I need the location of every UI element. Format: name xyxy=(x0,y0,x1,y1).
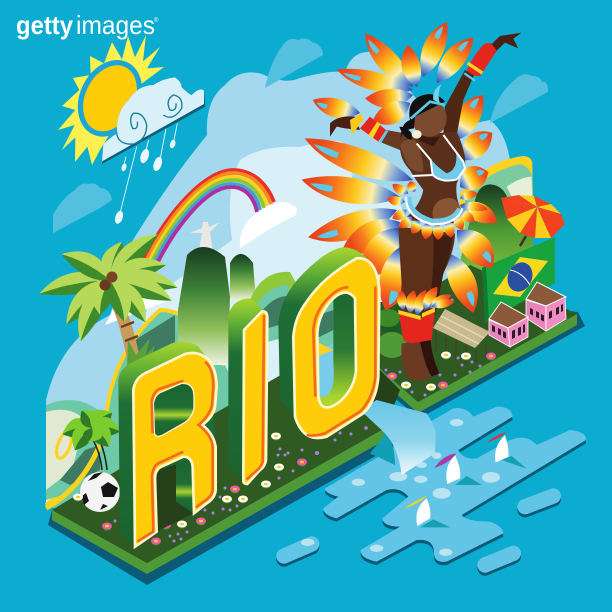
palm tree xyxy=(37,223,179,372)
side arm xyxy=(382,130,415,153)
shrubs by dancer feet xyxy=(376,302,407,358)
rainbow xyxy=(140,170,274,268)
left platform xyxy=(48,340,400,585)
lake xyxy=(284,407,586,568)
gettyimages watermark xyxy=(16,10,159,40)
thatched hut xyxy=(433,309,490,364)
R extrusion xyxy=(118,341,216,547)
sun and rain cloud xyxy=(58,35,205,225)
side hand xyxy=(330,116,360,137)
right platform xyxy=(368,265,585,418)
letter R xyxy=(118,341,217,547)
flag wall with Brazilian flag xyxy=(482,237,555,323)
lighter inner cloud xyxy=(46,141,420,505)
R face xyxy=(133,353,217,547)
I orange edge xyxy=(247,315,264,479)
red boots xyxy=(398,309,435,343)
small cloud top centre xyxy=(265,38,323,88)
letter I xyxy=(228,298,267,484)
pink houses xyxy=(489,282,566,347)
waterfall xyxy=(360,400,436,475)
beach umbrella xyxy=(501,195,565,246)
letter O xyxy=(278,247,379,438)
earring xyxy=(412,130,422,139)
headband xyxy=(411,102,445,119)
right hills behind dancer xyxy=(457,156,533,277)
lake body xyxy=(323,407,586,565)
right platform flowers xyxy=(384,290,496,396)
legs xyxy=(398,227,455,315)
raindrops xyxy=(113,123,177,225)
sun disc xyxy=(69,53,151,144)
sugarloaf mountain peaks xyxy=(178,247,300,365)
hair xyxy=(401,94,445,142)
small cloud top right xyxy=(490,74,548,123)
feet xyxy=(401,342,431,381)
soccer ball xyxy=(80,472,120,512)
palm fronds xyxy=(37,223,179,344)
sailboat red xyxy=(487,432,527,469)
O extrusion xyxy=(278,247,379,437)
I extrusion xyxy=(228,298,267,482)
white wedge clouds xyxy=(105,202,297,325)
headdress and wing feathers xyxy=(299,17,504,317)
side glove xyxy=(360,117,386,142)
house front xyxy=(489,302,528,347)
head xyxy=(412,100,447,137)
RIO 3D letters xyxy=(118,247,379,547)
R orange edge lines xyxy=(137,362,213,542)
raised glove xyxy=(467,43,497,76)
raised hand xyxy=(492,33,522,51)
left background hills xyxy=(46,310,260,530)
gettyimages watermark: getty xyxy=(16,10,73,40)
R leg gap xyxy=(157,460,193,532)
I face xyxy=(243,311,267,484)
small palms xyxy=(61,402,120,470)
O counter xyxy=(318,294,355,406)
torso xyxy=(400,132,465,223)
water highlights xyxy=(301,419,500,556)
boot cuff feathers xyxy=(396,284,455,317)
bikini top xyxy=(432,152,465,181)
sailboat yellow xyxy=(404,496,451,527)
left platform flowers xyxy=(73,426,368,546)
gettyimages watermark: images xyxy=(76,10,155,40)
gettyimages watermark: ® xyxy=(154,17,159,24)
lake pills xyxy=(284,496,553,568)
R counter xyxy=(154,384,193,436)
Christ the Redeemer statue xyxy=(190,222,220,250)
small cloud lower left xyxy=(53,184,112,233)
sailboat purple xyxy=(434,453,482,485)
samba dancer xyxy=(299,17,522,381)
O face xyxy=(293,258,379,438)
coconuts xyxy=(100,280,110,290)
skirt feathers xyxy=(386,179,489,240)
sun rays xyxy=(58,35,164,165)
O orange edge lines xyxy=(307,287,375,436)
rain cloud xyxy=(102,77,205,164)
big pale blue sky cloud xyxy=(46,52,512,505)
skirt band xyxy=(407,197,462,224)
cloud swirls xyxy=(117,95,182,144)
house rear xyxy=(526,282,566,331)
raised arm xyxy=(443,70,474,135)
